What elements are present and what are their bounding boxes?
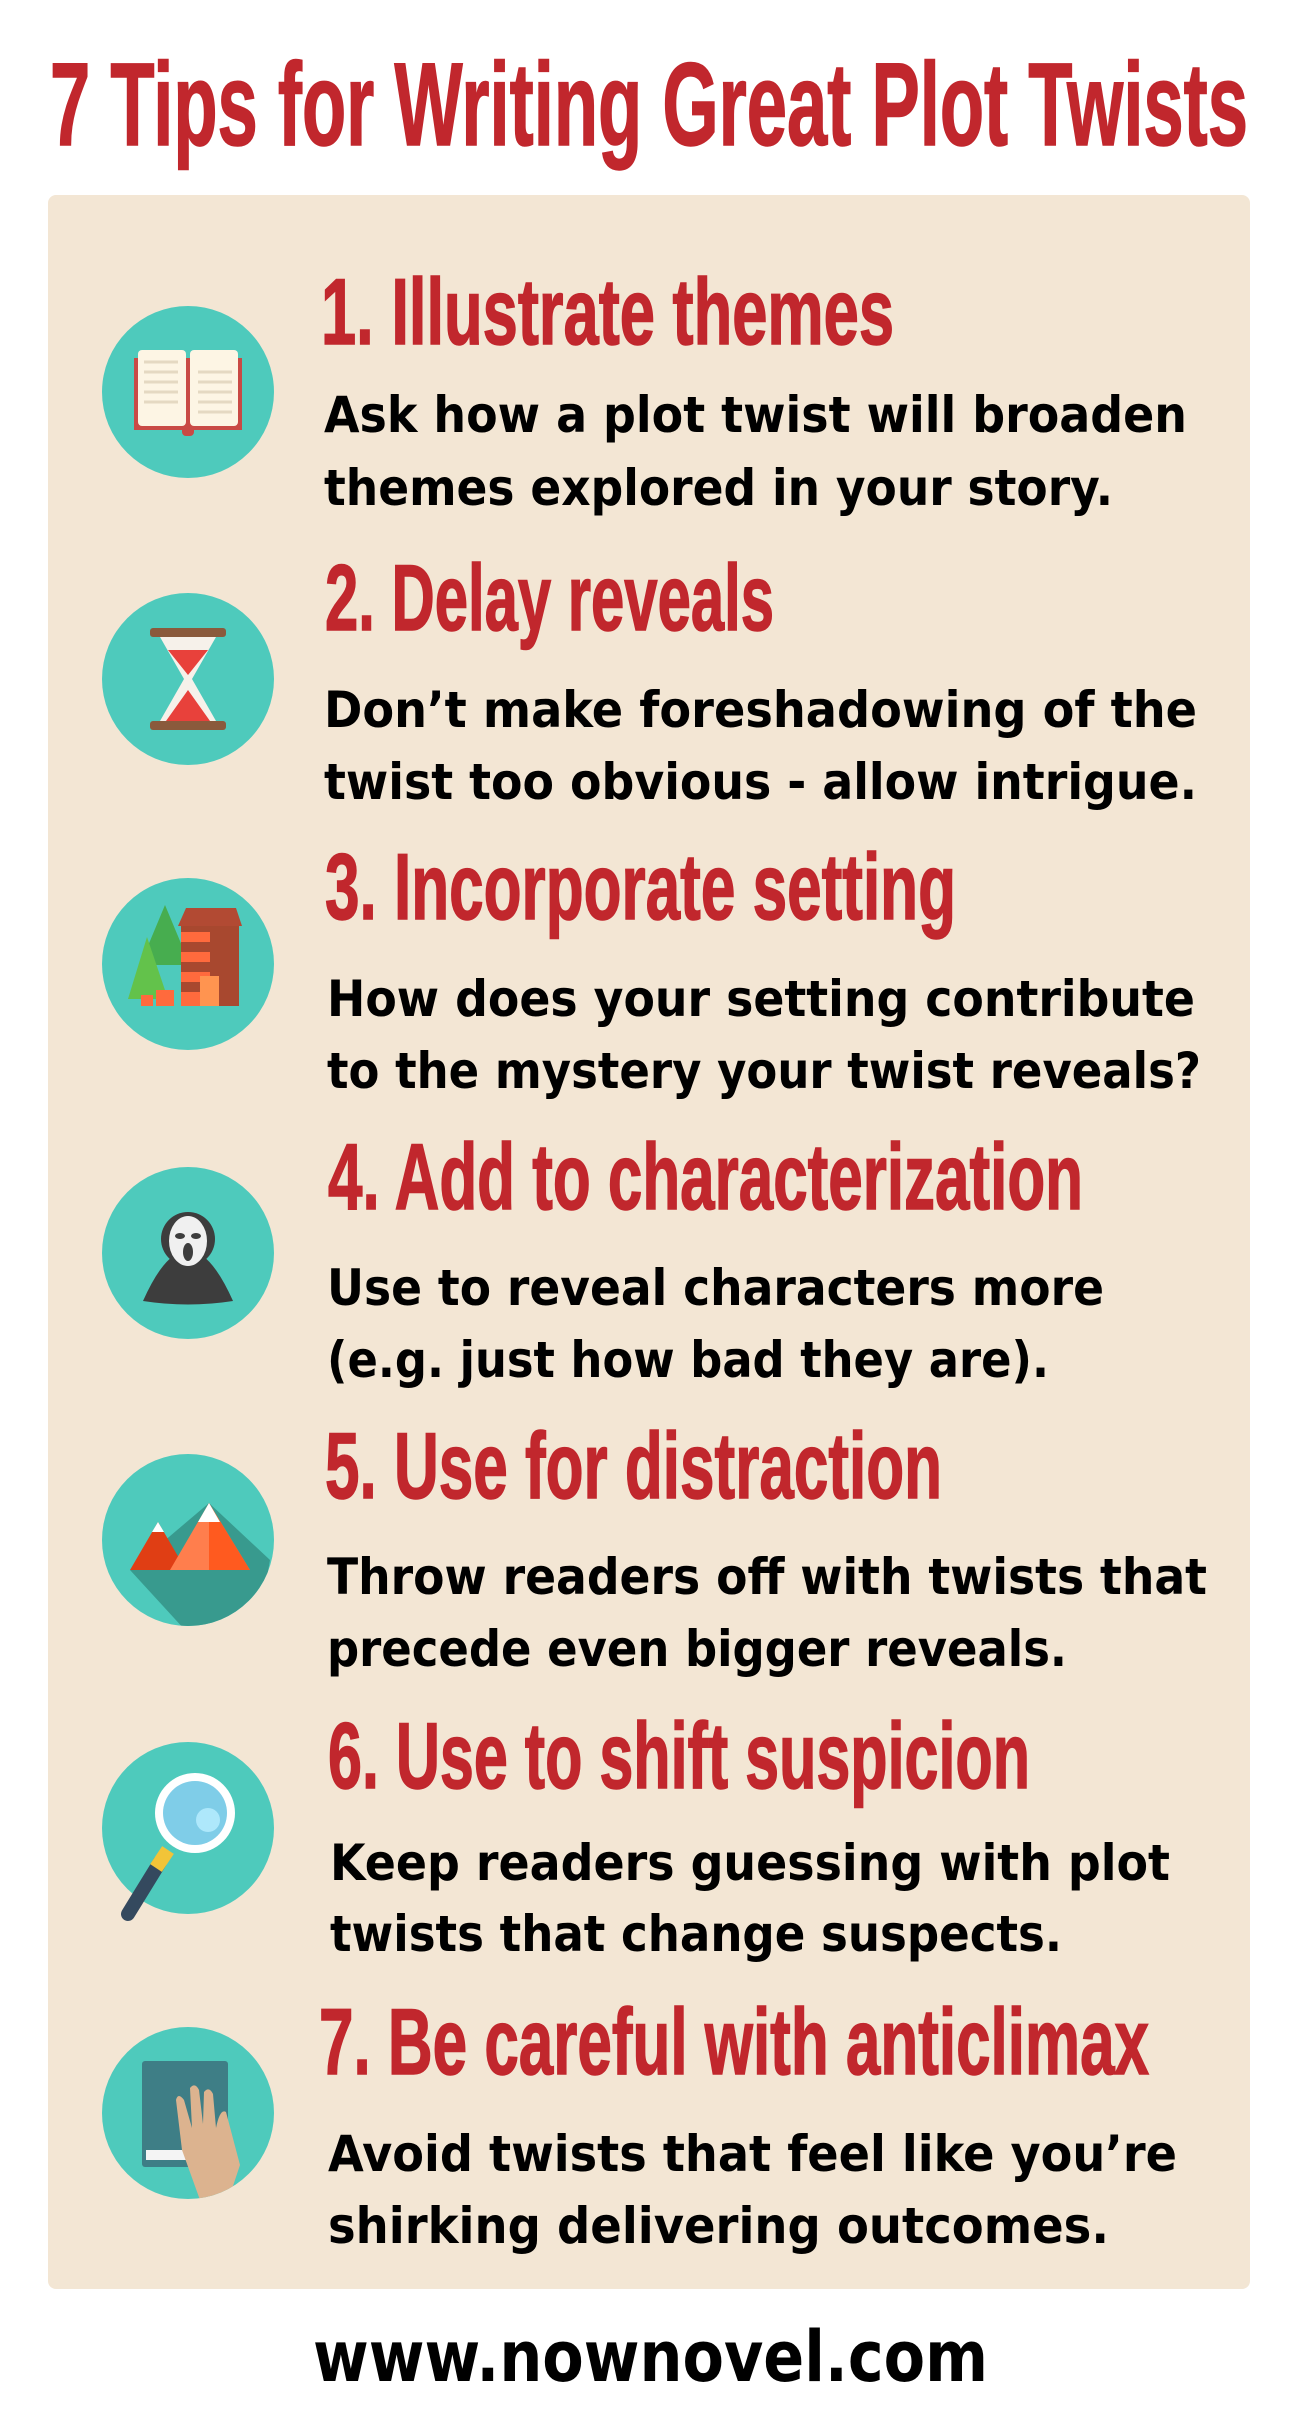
body 7: Avoid twists that feel like you’re — [328, 2125, 1177, 2183]
body 3: to the mystery your twist reveals? — [327, 1042, 1201, 1100]
tip 4 — [102, 1124, 1104, 1389]
body 3 — [327, 970, 1201, 1100]
tip 1 — [102, 259, 1187, 517]
heading 1: 1. Illustrate themes — [321, 259, 894, 364]
body 1: themes explored in your story. — [324, 459, 1113, 517]
icon: open book — [102, 306, 274, 478]
tip 6 — [102, 1703, 1170, 1963]
icon: mountains — [102, 1454, 274, 1630]
tip 5 — [102, 1413, 1207, 1678]
body 4: (e.g. just how bad they are). — [327, 1331, 1049, 1389]
heading 5: 5. Use for distraction — [325, 1413, 942, 1518]
body 5: precede even bigger reveals. — [327, 1620, 1067, 1678]
icon: hourglass — [102, 593, 274, 765]
body 1: Ask how a plot twist will broaden — [324, 386, 1187, 444]
body 2 — [324, 681, 1197, 811]
icon: cabin and trees — [102, 878, 274, 1050]
body 2: Don’t make foreshadowing of the — [324, 681, 1197, 739]
body 4: Use to reveal characters more — [327, 1259, 1104, 1317]
body 6: Keep readers guessing with plot — [330, 1834, 1170, 1892]
tip 3 — [102, 834, 1201, 1100]
body 7: shirking delivering outcomes. — [328, 2197, 1109, 2255]
body 4 — [327, 1259, 1104, 1389]
body 5 — [327, 1548, 1207, 1678]
tip 2 — [102, 545, 1197, 811]
body 1 — [324, 386, 1187, 517]
icon: hand on book — [102, 2027, 274, 2210]
tip 7 — [102, 1989, 1177, 2255]
icon: ghost mask — [102, 1167, 274, 1339]
heading 3: 3. Incorporate setting — [325, 834, 956, 939]
body 2: twist too obvious - allow intrigue. — [324, 753, 1197, 811]
body 6: twists that change suspects. — [330, 1905, 1062, 1963]
footer url: www.nownovel.com — [313, 2316, 988, 2398]
body 6 — [330, 1834, 1170, 1963]
icon: magnifying glass — [102, 1742, 274, 1914]
body 5: Throw readers off with twists that — [327, 1548, 1207, 1606]
body 3: How does your setting contribute — [327, 970, 1195, 1028]
heading 2: 2. Delay reveals — [325, 545, 774, 650]
body 7 — [328, 2125, 1177, 2255]
